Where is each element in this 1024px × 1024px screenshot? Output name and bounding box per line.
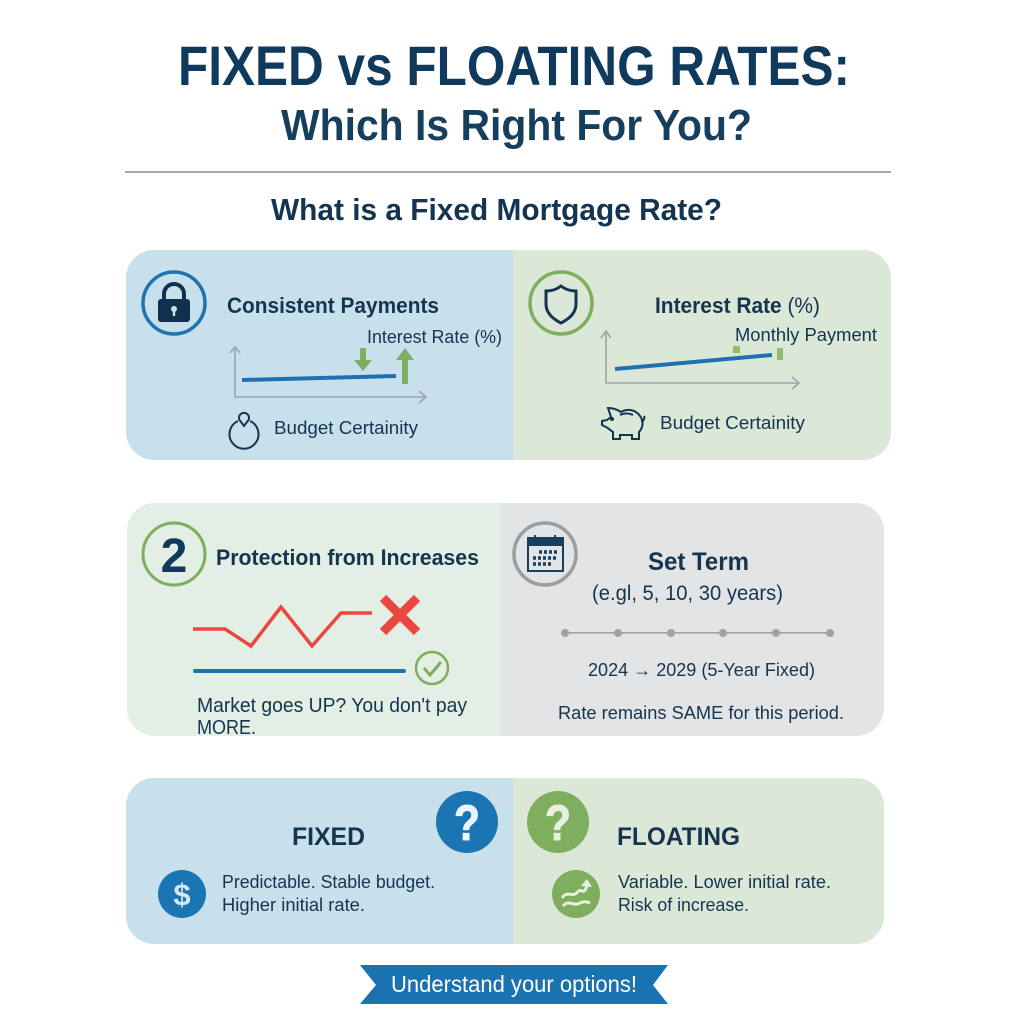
icon: rising waves (552, 870, 600, 918)
panel heading: Protection from Increases (216, 545, 479, 570)
banner text: Understand your options! (391, 971, 637, 997)
banner (360, 965, 668, 1004)
caption: Budget Certainity (660, 413, 805, 433)
icon: shield (530, 272, 592, 334)
icon: piggy bank (602, 408, 644, 439)
number badge: 2 (161, 530, 187, 583)
icon: question mark: ? (545, 795, 571, 851)
arrow: down (354, 348, 372, 371)
title: FIXED vs FLOATING RATES: (178, 34, 850, 97)
note: Rate remains SAME for this period. (558, 703, 844, 723)
icon: dollar (158, 870, 206, 918)
market line (193, 607, 372, 646)
date range: 2024 → 2029 (5-Year Fixed) (588, 660, 815, 680)
panel text: Risk of increase. (618, 895, 749, 915)
panel: consistent payments (126, 250, 513, 460)
arrow: up (396, 348, 414, 384)
icon: question mark (436, 791, 498, 853)
panel: fixed (126, 778, 513, 944)
panel heading: Set Term (648, 548, 749, 576)
panel heading: FLOATING (617, 823, 740, 851)
line chart (601, 331, 799, 389)
panel: interest rate (513, 250, 891, 460)
icon: question mark (527, 791, 589, 853)
line chart (230, 347, 426, 403)
panel text: Predictable. Stable budget. (222, 872, 435, 892)
icon: ring (230, 413, 258, 449)
panel heading: Consistent Payments (227, 293, 439, 318)
icon: dollar: $ (173, 877, 191, 912)
timeline (561, 629, 834, 637)
panel text: Market goes UP? You don't pay (197, 695, 467, 717)
panel heading: Interest Rate (%) (655, 293, 820, 318)
subtitle: Which Is Right For You? (281, 101, 752, 150)
chart label: Interest Rate (%) (367, 327, 502, 347)
caption: Budget Certainity (274, 418, 418, 438)
icon: red cross (383, 598, 417, 632)
panel: set term (500, 503, 884, 736)
icon: calendar (514, 523, 576, 585)
icon: check (416, 652, 448, 684)
panel text: Variable. Lower initial rate. (618, 872, 831, 892)
panel text: Higher initial rate. (222, 895, 365, 915)
number badge (143, 523, 205, 585)
panel text: MORE. (197, 717, 256, 739)
icon: padlock (143, 272, 205, 334)
panel: floating (513, 778, 884, 944)
panel heading: FIXED (292, 823, 365, 851)
panel: protection from increases (127, 503, 500, 739)
fixed line (193, 669, 406, 673)
chart label: Monthly Payment (735, 325, 877, 345)
term examples: (e.gl, 5, 10, 30 years) (592, 582, 783, 605)
section heading: What is a Fixed Mortgage Rate? (271, 192, 722, 227)
icon: question mark: ? (454, 795, 480, 851)
